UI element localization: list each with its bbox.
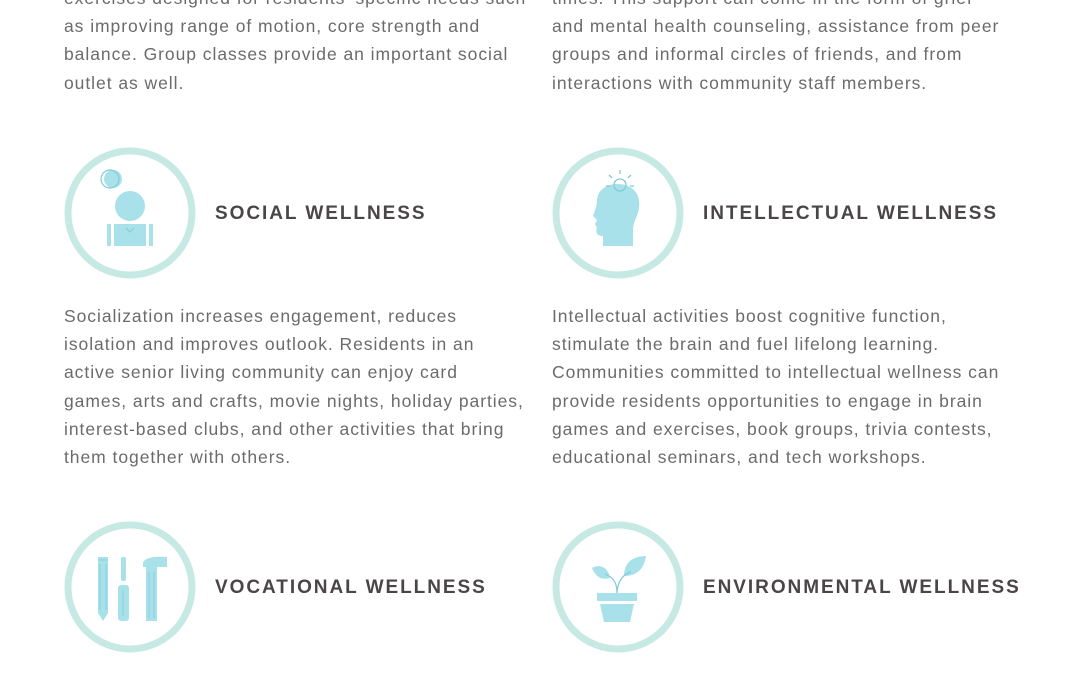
text: emotional wellness continuation (552, 0, 999, 93)
text: intellectual wellness body: educational seminars, and tech workshops. (552, 447, 927, 467)
text: physical wellness continuation: outlet as well. (64, 73, 184, 93)
text: emotional wellness continuation: groups and informal circles of friends, and from (552, 44, 962, 64)
text: intellectual wellness body: Intellectual activities boost cognitive function, (552, 306, 947, 326)
text: physical wellness continuation (64, 0, 526, 93)
text: intellectual wellness body: stimulate the brain and fuel lifelong learning. (552, 334, 939, 354)
icon: vocational tools (64, 522, 196, 652)
text: physical wellness continuation: as improving range of motion, core strength and (64, 16, 480, 36)
text: social wellness body: Socialization increases engagement, reduces (64, 306, 457, 326)
text: social wellness body: interest-based clubs, and other activities that bring (64, 419, 504, 439)
text: social wellness body: games, arts and crafts, movie nights, holiday parties, (64, 391, 524, 411)
text: social wellness body: active senior living community can enjoy card (64, 362, 458, 382)
heading: environmental wellness: ENVIRONMENTAL WELLNESS (703, 577, 1021, 598)
text: social wellness body: isolation and improves outlook. Residents in an (64, 334, 474, 354)
text: intellectual wellness body: games and exercises, book groups, trivia contests, (552, 419, 992, 439)
text: social wellness body (64, 306, 524, 467)
text: intellectual wellness body: provide residents opportunities to engage in brain (552, 391, 983, 411)
heading: social wellness: SOCIAL WELLNESS (215, 203, 427, 224)
text: intellectual wellness body: Communities committed to intellectual wellness can (552, 362, 999, 382)
icon: environmental plant (552, 522, 684, 652)
text: intellectual wellness body (552, 306, 999, 467)
text: social wellness body: them together with others. (64, 447, 291, 467)
heading: vocational wellness: VOCATIONAL WELLNESS (215, 577, 487, 598)
heading: intellectual wellness: INTELLECTUAL WELLNESS (703, 203, 998, 224)
icon: social person (64, 148, 196, 278)
text: emotional wellness continuation: interactions with community staff members. (552, 73, 927, 93)
icon: intellectual head (552, 148, 684, 278)
text: emotional wellness continuation: and mental health counseling, assistance from peer (552, 16, 999, 36)
text: physical wellness continuation: balance. Group classes provide an important social (64, 44, 508, 64)
